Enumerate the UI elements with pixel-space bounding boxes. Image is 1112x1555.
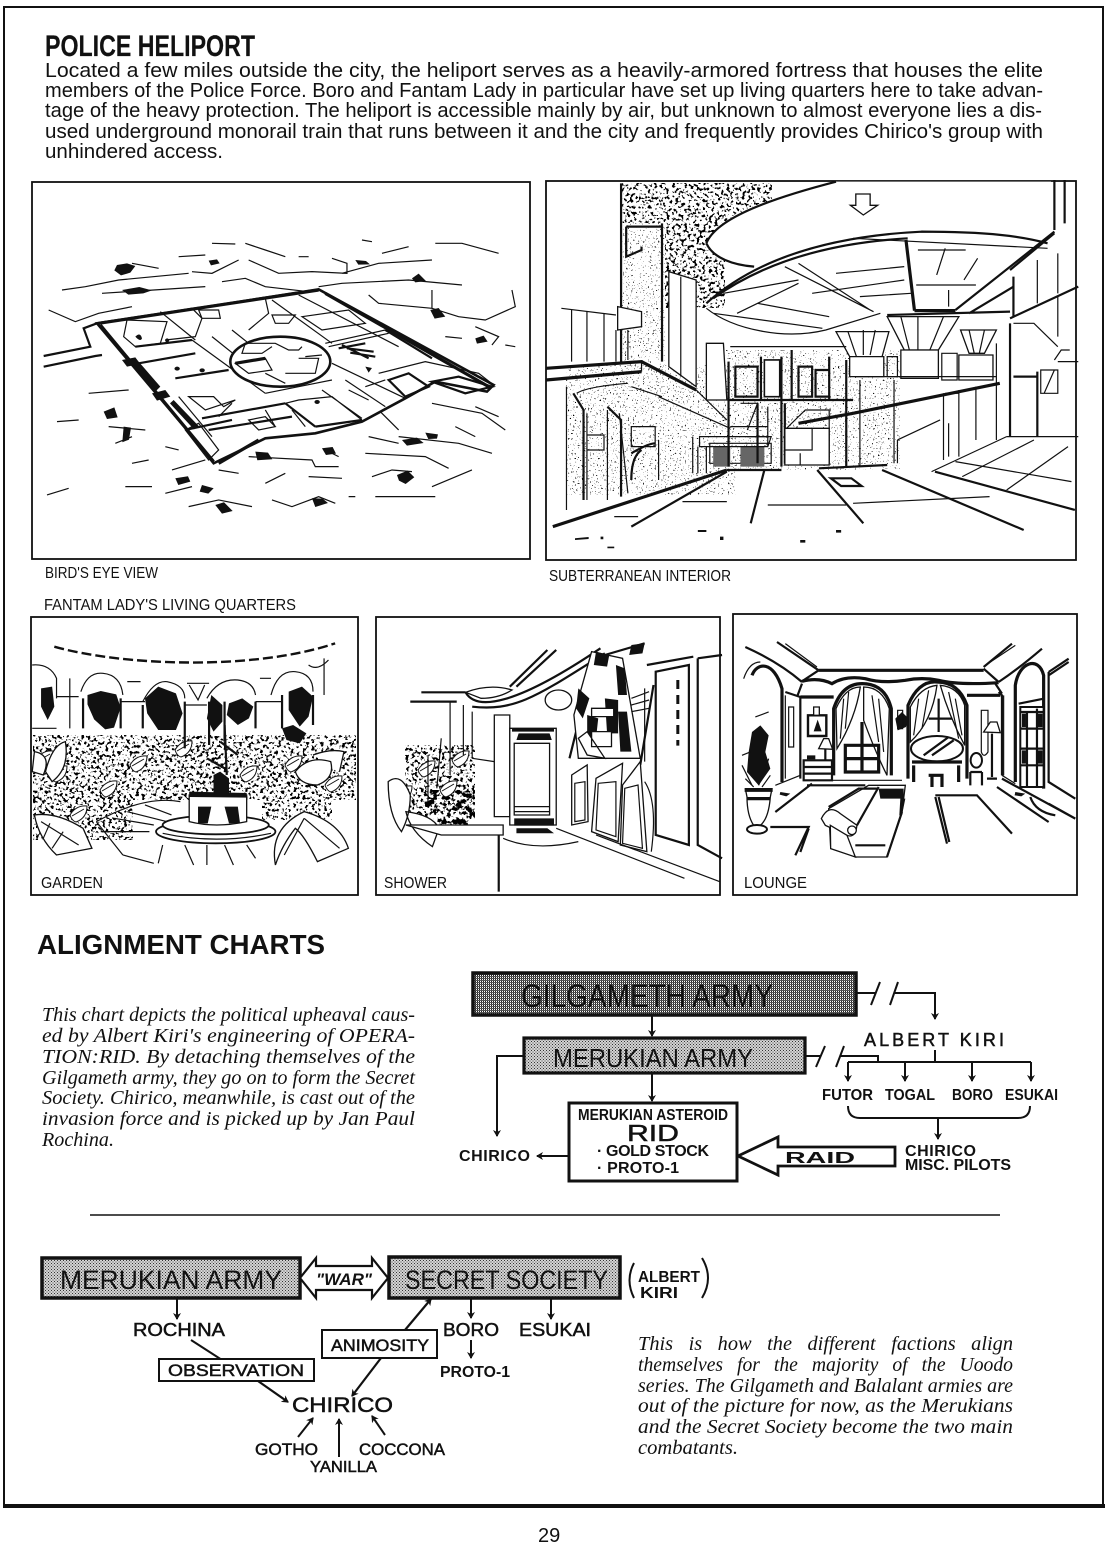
label: Coccona: COCCONA [359,1440,446,1459]
left and right arches [744,659,1075,799]
planter and floor [388,738,720,892]
box: Gilgameth Army: GILGAMETH ARMY [521,978,773,1014]
box: observation [159,1359,314,1381]
arrow: Merukian to Chirico [497,1056,523,1136]
caption: subterranean interior: SUBTERRANEAN INTERIOR [549,568,731,585]
text block: chart one description: ed by Albert Kiri's engineering of OPERA- [42,1026,415,1047]
label: Chirico: CHIRICO [292,1394,393,1417]
potted plant and urn [742,712,773,834]
label: Chirico and pilots: CHIRICO [905,1143,976,1160]
label: Albert Kiri: ALBERT [638,1269,700,1286]
arrow: Boro to Proto-1 [470,1340,472,1358]
floor and rugs [770,779,1075,855]
bracket to Chirico [848,1106,1030,1139]
ceiling lines [410,648,605,708]
caption: living quarters: FANTAM LADY'S LIVING QUARTERS [44,597,296,614]
text block: chart two description [638,1334,1013,1459]
title: POLICE HELIPORT [45,30,255,63]
text block: chart two description: out of the picture for now, as the Merukians [638,1396,1013,1417]
label: Albert Kiri: ALBERT KIRI [864,1030,1004,1050]
chart: upheaval flow [459,973,1058,1181]
right walls [798,180,1078,467]
arched windows with drapes [834,682,967,787]
arrow: Merukian to asteroid [651,1073,653,1101]
Kiri group labels: TOGAL [885,1087,935,1104]
intro text block: members of the Police Force. Boro and Fantam Lady in particular have set up living quarters here to take advan- [45,80,1043,102]
foreground leaves [32,742,348,865]
floor perspective [553,437,1078,548]
arrow: observation to Chirico [258,1381,288,1402]
room outline [745,642,1042,785]
text block: chart two description: and the Secret Society become the two main [638,1417,1013,1438]
garden foliage [33,735,356,840]
box: observation: OBSERVATION [168,1361,304,1380]
box: animosity [322,1330,437,1358]
intro text block: tage of the heavy protection. The heliport is accessible mainly by air, but unknown to almost everyone lies a dis- [45,100,1042,122]
wall art, lamps and furniture [804,707,1000,785]
ink texture upper walls [566,183,900,495]
panel: subterranean interior [546,180,1078,560]
text block: chart one description: TION:RID. By detaching themselves of the [42,1047,415,1068]
arrow: asteroid to Chirico [537,1155,569,1157]
Kiri group labels: ESUKAI [1005,1087,1058,1104]
helipad circle [230,337,330,387]
panel: lounge [733,614,1077,895]
intro text block: Located a few miles outside the city, the heliport serves as a heavily-armored fortress that houses the elite [45,60,1043,82]
label: Albert Kiri [630,1258,708,1302]
Kiri branch arrows [848,1050,1031,1081]
box: Gilgameth Army [473,973,856,1015]
columns and centre wall [836,317,996,380]
heliport deck [44,289,494,463]
label: Chirico and pilots: MISC. PILOTS [905,1157,1011,1174]
terrain scribbles [47,240,515,514]
box: animosity: ANIMOSITY [331,1336,429,1355]
box: Merukian asteroid: · PROTO-1 [597,1160,679,1177]
panel: shower [376,617,722,895]
label: Chirico and pilots [905,1143,1011,1174]
arrow: Merukian to Rochina [176,1298,178,1319]
box: Merukian Army [42,1258,300,1298]
text block: chart one description [41,1005,416,1151]
left wall structures [546,183,771,510]
box: Merukian Army: MERUKIAN ARMY [553,1043,753,1073]
arrow: Gilgameth to Merukian [651,1015,653,1036]
chart: faction alignment [42,1257,708,1476]
lockers [572,762,647,852]
lounge label: LOUNGE [744,875,807,892]
intro text block [45,60,1043,163]
centre machinery [706,343,853,467]
page number: 29 [538,1525,560,1547]
oval ceiling [706,182,1054,334]
arrows from Secret Society [471,1298,551,1319]
Kiri group labels: FUTOR [822,1087,873,1104]
label: Proto-1: PROTO-1 [440,1364,510,1381]
double arrow: war [300,1258,388,1298]
intro text block: unhindered access. [45,141,223,163]
text block: chart one description: Rochina. [41,1130,114,1151]
box: Secret Society [389,1257,620,1298]
text block: chart one description: Society. Chirico, meanwhile, is cast out of the [42,1088,415,1109]
label: Rochina: ROCHINA [133,1320,225,1340]
text block: chart one description: Gilgameth army, they go on to form the Secret [42,1068,416,1089]
icon: down arrow [850,194,878,215]
shower capsule [450,702,556,833]
raid arrow [738,1137,895,1175]
box: Merukian Army [524,1038,805,1073]
Kiri group labels [822,1087,1058,1104]
double arrow: war: "WAR" [316,1270,373,1289]
garden arches [32,643,335,748]
box: Merukian asteroid [569,1103,737,1181]
line: Rochina to observation [191,1340,222,1360]
divider [90,1214,1000,1216]
break line to Albert Kiri [856,982,935,1019]
heading: alignment charts: ALIGNMENT CHARTS [37,929,325,960]
label: Boro: BORO [443,1320,499,1340]
label: Albert Kiri: KIRI [640,1285,678,1302]
shower plant [395,745,475,830]
panel: garden [31,617,358,895]
box: Merukian asteroid: MERUKIAN ASTEROID [578,1107,728,1124]
garden label: GARDEN [41,875,103,892]
text block: chart two description: series. The Gilgameth and Balalant armies are [638,1376,1013,1397]
text block: chart two description: This is how the different factions align [638,1334,1013,1355]
text block: chart two description: themselves for the majority of the Uoodo [638,1355,1013,1376]
box: Merukian asteroid: RID [627,1120,679,1146]
text block: chart one description: invasion force and is picked up by Jan Paul [42,1109,415,1130]
caption: bird's eye view: BIRD'S EYE VIEW [45,565,158,582]
right wall [645,655,722,858]
label: Chirico: CHIRICO [459,1148,530,1165]
arrow: animosity to Chirico [352,1358,381,1396]
break line to Kiri group [805,1046,878,1067]
arrows to Chirico [298,1416,385,1457]
label: Yanilla: YANILLA [310,1459,377,1476]
sofa [821,785,905,857]
text block: chart one description: This chart depicts the political upheaval caus- [42,1005,415,1026]
label: Gotho: GOTHO [255,1440,318,1459]
label: Esukai: ESUKAI [519,1320,591,1340]
intro text block: used underground monorail train that runs between it and the city and frequently provides Chirico's group with [45,121,1043,143]
trees in arches [41,687,313,743]
raid arrow: RAID [785,1150,855,1167]
machinery [545,643,693,765]
panel: bird's eye view [32,182,530,559]
Kiri group labels: BORO [952,1087,993,1104]
arrow: animosity to Secret Society [405,1299,431,1330]
shower label: SHOWER [384,875,447,892]
fountain [96,725,275,865]
box: Secret Society: SECRET SOCIETY [405,1265,608,1295]
box: Merukian Army: MERUKIAN ARMY [60,1265,282,1295]
box: Merukian asteroid: · GOLD STOCK [597,1143,709,1160]
text block: chart two description: combatants. [638,1438,738,1459]
